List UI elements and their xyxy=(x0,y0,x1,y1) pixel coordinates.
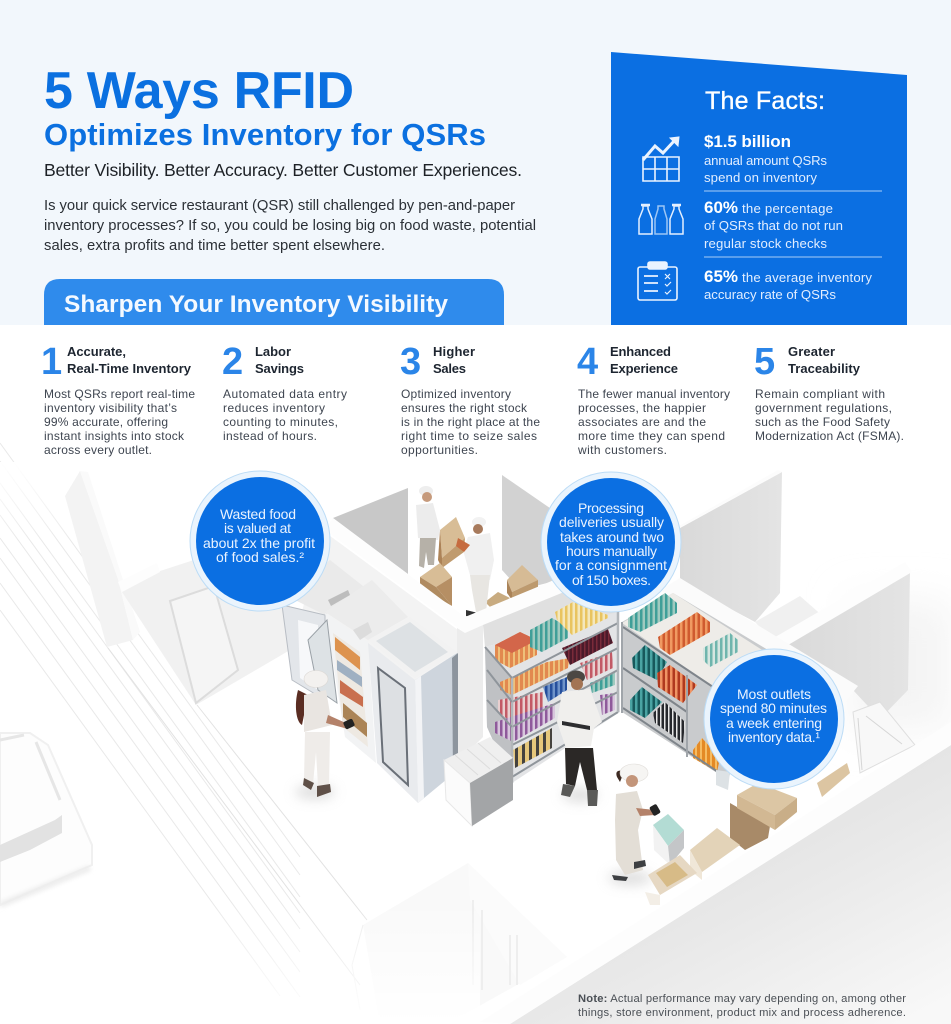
inventory station xyxy=(653,814,684,865)
fact: stock checks xyxy=(704,198,843,251)
column 1: accurate inventory: Accurate, xyxy=(67,344,126,359)
callout: data entry time: spend 80 minutes xyxy=(720,700,827,716)
top fade over road lines xyxy=(0,462,150,542)
illustration: store floor plan xyxy=(0,443,951,1024)
callout: data entry time xyxy=(704,649,844,789)
column 2: labor savings: counting to minutes, xyxy=(223,415,338,429)
footnote xyxy=(578,993,906,1019)
glass cooler with products xyxy=(308,580,408,763)
fact: accuracy xyxy=(704,267,872,302)
column 5: greater traceability: Greater xyxy=(788,344,835,359)
column 1: accurate inventory: 99% accurate, offering xyxy=(44,415,168,429)
store front wall xyxy=(480,722,951,1024)
column 3: higher sales: is in the right place at the xyxy=(401,415,540,429)
fact: stock checks: 60% xyxy=(704,198,738,217)
callout: data entry time: Most outlets xyxy=(737,686,811,702)
column 1: accurate inventory: instant insights into stock xyxy=(44,429,185,443)
column 1: accurate inventory: 1 xyxy=(41,341,62,383)
callout: processing deliveries: hours manually xyxy=(566,543,657,559)
column 4: enhanced experience: associates are and the xyxy=(578,415,706,429)
facts heading: The Facts: xyxy=(705,87,825,115)
column 4: enhanced experience: Enhanced xyxy=(610,344,671,359)
title: Optimizes Inventory for QSRs xyxy=(44,117,486,152)
column 3: higher sales: Sales xyxy=(433,361,466,376)
column 3: higher sales: 3 xyxy=(400,341,421,383)
intro paragraph: sales, extra profits and time better spent elsewhere. xyxy=(44,238,385,254)
section heading tab: Sharpen Your Inventory Visibility xyxy=(64,291,448,318)
worker two xyxy=(456,517,494,618)
fact: spend: annual amount QSRs xyxy=(704,153,827,168)
small white crate xyxy=(444,737,513,826)
bottom left fade xyxy=(0,900,480,1024)
column 1: accurate inventory xyxy=(41,341,195,457)
back room wall and door xyxy=(118,545,290,705)
fact: accuracy: 65% xyxy=(704,267,738,286)
column 2: labor savings: Automated data entry xyxy=(223,387,347,401)
third cooler behind xyxy=(282,560,368,700)
column 4: enhanced experience: The fewer manual inventory xyxy=(578,387,730,401)
column 4: enhanced experience: Experience xyxy=(610,361,678,376)
callout: processing deliveries: for a consignment xyxy=(555,557,667,573)
fact: spend: spend on inventory xyxy=(704,170,817,185)
column 5: greater traceability: Modernization Act (FSMA). xyxy=(755,429,904,443)
icon: clipboard xyxy=(638,262,677,300)
column 5: greater traceability: Traceability xyxy=(788,361,861,376)
intro paragraph xyxy=(44,198,536,254)
callout: processing deliveries xyxy=(541,472,681,612)
column 2: labor savings xyxy=(222,341,347,443)
fact: stock checks: of QSRs that do not run xyxy=(704,218,843,233)
callout: processing deliveries: of 150 boxes. xyxy=(572,572,651,588)
bottom room xyxy=(352,863,567,1024)
worker one xyxy=(416,486,440,568)
floor shadows xyxy=(295,785,652,885)
callout: processing deliveries: takes around two xyxy=(560,529,664,545)
worker with scanner xyxy=(612,764,661,881)
shelf boards xyxy=(485,612,618,783)
column 4: enhanced experience: processes, the happier xyxy=(578,401,706,415)
rear floor and right walls xyxy=(660,470,951,773)
column 3: higher sales xyxy=(400,341,540,457)
column 3: higher sales: ensures the right stock xyxy=(401,401,528,415)
shelf products xyxy=(495,632,537,668)
column 2: labor savings: Labor xyxy=(255,344,291,359)
column 5: greater traceability xyxy=(754,341,904,443)
column 3: higher sales: right time to seize sales xyxy=(401,429,537,443)
fact: accuracy: accuracy rate of QSRs xyxy=(704,287,836,302)
walk-in cooler unit xyxy=(368,617,458,803)
section heading tab xyxy=(44,279,504,325)
callout: wasted food: Wasted food xyxy=(220,506,296,522)
parked car xyxy=(0,733,92,905)
intro paragraph: Is your quick service restaurant (QSR) still challenged by pen-and-paper xyxy=(44,198,515,214)
column 5: greater traceability: such as the Food Safety xyxy=(755,415,890,429)
footnote: Note: Actual performance may vary depending on, among other xyxy=(578,993,906,1005)
column 1: accurate inventory: across every outlet. xyxy=(44,443,152,457)
column 4: enhanced experience: more time they can spend xyxy=(578,429,725,443)
column 5: greater traceability: government regulations, xyxy=(755,401,892,415)
column 3: higher sales: Higher xyxy=(433,344,475,359)
fact: stock checks: regular stock checks xyxy=(704,236,827,251)
manager with tablet xyxy=(557,670,602,806)
footnote: things, store environment, product mix and process adherence. xyxy=(578,1007,906,1019)
callout: data entry time: inventory data.¹ xyxy=(728,729,820,745)
title xyxy=(44,62,486,152)
column 3: higher sales: opportunities. xyxy=(401,443,478,457)
subtitle: Better Visibility. Better Accuracy. Better Customer Experiences. xyxy=(44,160,522,180)
column 4: enhanced experience xyxy=(577,341,730,457)
left shelving unit xyxy=(485,602,620,783)
column 4: enhanced experience: 4 xyxy=(577,341,598,383)
callout: wasted food: is valued at xyxy=(224,520,291,536)
callout: wasted food xyxy=(190,471,330,611)
delivery boxes xyxy=(645,763,850,905)
header background xyxy=(0,0,951,325)
column 1: accurate inventory: Real-Time Inventory xyxy=(67,361,192,376)
panel: the facts xyxy=(611,52,907,325)
callout: wasted food: about 2x the profit xyxy=(203,535,315,551)
callout: wasted food: of food sales.² xyxy=(216,549,304,565)
callout: data entry time: a week entering xyxy=(726,715,822,731)
column 2: labor savings: instead of hours. xyxy=(223,429,317,443)
icon: bottles xyxy=(639,205,683,234)
icon: growth chart xyxy=(643,137,679,181)
fact: accuracy: the average inventory xyxy=(742,270,872,285)
back room workers and boxes xyxy=(416,486,538,618)
fact: stock checks: the percentage xyxy=(742,201,833,216)
worker at cooler xyxy=(296,670,355,797)
column 2: labor savings: 2 xyxy=(222,341,243,383)
right shelving unit xyxy=(622,593,773,790)
central white wall tops xyxy=(300,518,618,760)
back stock room walls xyxy=(333,475,560,590)
column 3: higher sales: Optimized inventory xyxy=(401,387,511,401)
column 1: accurate inventory: Most QSRs report real-time xyxy=(44,387,195,401)
column 2: labor savings: reduces inventory xyxy=(223,401,325,415)
left outer wall xyxy=(65,471,133,647)
column 2: labor savings: Savings xyxy=(255,361,304,376)
column 5: greater traceability: 5 xyxy=(754,341,775,383)
column 5: greater traceability: Remain compliant with xyxy=(755,387,885,401)
callout: processing deliveries: deliveries usually xyxy=(559,514,664,530)
column 1: accurate inventory: inventory visibility that’s xyxy=(44,401,177,415)
fact: spend xyxy=(704,132,827,185)
road and parking lines xyxy=(0,443,367,997)
intro paragraph: inventory processes? If so, you could be losing big on food waste, potential xyxy=(44,218,536,234)
fact: spend: $1.5 billion xyxy=(704,132,791,151)
title: 5 Ways RFID xyxy=(44,62,354,120)
callout: processing deliveries: Processing xyxy=(578,500,644,516)
column 4: enhanced experience: with customers. xyxy=(577,443,667,457)
stacked boxes xyxy=(420,517,538,610)
